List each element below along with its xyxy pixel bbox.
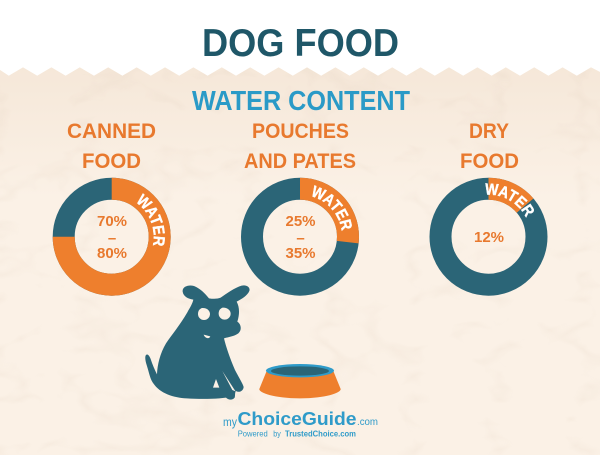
- value: 25% to 35%: 35%: [285, 245, 316, 262]
- panel: dry food: [430, 120, 548, 296]
- value: 25% to 35%: [285, 213, 316, 262]
- heading: canned food: CANNED: [67, 120, 156, 143]
- value: 70% to 80%: [97, 213, 127, 262]
- heading: canned food: [67, 120, 156, 173]
- dog eyes: [198, 308, 231, 320]
- logo: myChoiceGuide: ChoiceGuide: [238, 408, 356, 429]
- value: 12%: 12%: [474, 229, 504, 246]
- dog mouth: [204, 335, 210, 338]
- heading: dry food: [460, 120, 519, 173]
- heading: dry food: DRY: [469, 120, 509, 143]
- logo: myChoiceGuide: Powered: [238, 430, 268, 438]
- logo: myChoiceGuide: by: [273, 430, 281, 438]
- logo: myChoiceGuide: .com: [357, 417, 378, 428]
- value: 25% to 35%: –: [296, 230, 305, 247]
- water label: canned food: WATER: [137, 193, 166, 246]
- dog leg gaps: [213, 371, 236, 391]
- value: 25% to 35%: 25%: [285, 213, 316, 230]
- panel: pouches and pates: [241, 120, 359, 296]
- title: DOG FOOD: [202, 22, 399, 65]
- illustration: food bowl: [259, 364, 341, 398]
- value: 70% to 80%: 80%: [97, 245, 127, 262]
- value: 70% to 80%: –: [108, 230, 116, 247]
- heading: pouches and pates: [244, 120, 356, 173]
- water label: pouches and pates: WATER: [312, 185, 352, 232]
- logo: myChoiceGuide: my: [223, 417, 237, 429]
- heading: dry food: FOOD: [460, 150, 519, 173]
- panel: canned food: [52, 120, 171, 296]
- heading: pouches and pates: AND PATES: [244, 150, 356, 173]
- logo: myChoiceGuide: [223, 408, 378, 438]
- heading: canned food: FOOD: [82, 150, 141, 173]
- donut chart: dry food: [440, 189, 536, 285]
- water label: dry food: WATER: [485, 183, 534, 218]
- illustration: dog: [145, 285, 250, 400]
- subtitle: WATER CONTENT: [192, 85, 410, 116]
- logo: myChoiceGuide: TrustedChoice.com: [285, 430, 356, 438]
- value: 70% to 80%: 70%: [97, 213, 127, 230]
- donut chart: pouches and pates: [252, 189, 348, 285]
- heading: pouches and pates: POUCHES: [252, 120, 349, 143]
- donut chart: canned food: [64, 189, 160, 285]
